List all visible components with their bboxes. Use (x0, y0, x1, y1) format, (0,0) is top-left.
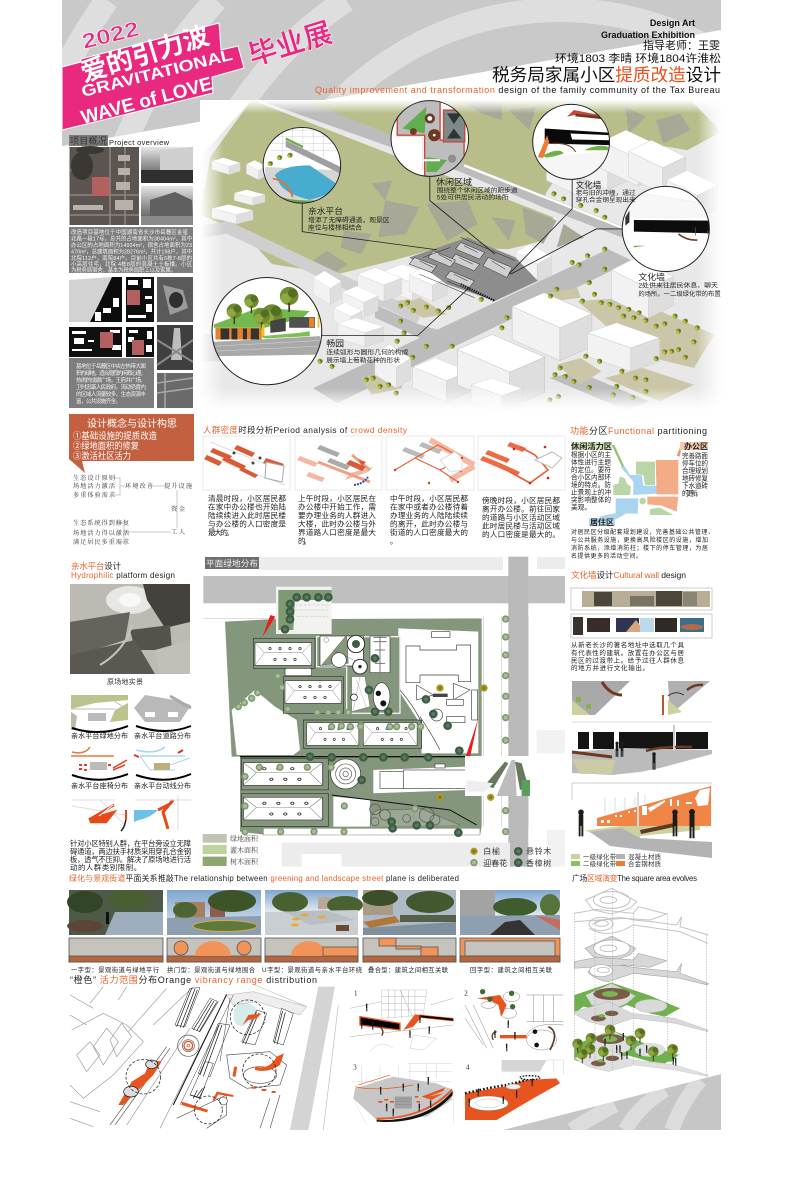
caption row 1 (71, 731, 191, 740)
heading: graduation show: 毕业展 (244, 16, 336, 73)
diagram: concept flow: 场地活力得以激活 (73, 529, 129, 537)
layer: paving (574, 936, 708, 985)
header text block (315, 18, 721, 95)
text: hydrophilic platform: 板，透气不压抑。解决了原场地进行活 (70, 855, 191, 864)
text: leisure zone: 体性进行主题 (571, 458, 611, 466)
text block: location analysis: 基地位于岳麓区中央左热带大面 (76, 362, 146, 370)
panel: design concept callout: ①基础设施的提质改造 (73, 430, 157, 441)
slab buildings (175, 988, 293, 1098)
text: morning: 在家中办公楼也开始陆 (208, 502, 286, 512)
panel: cultural wall elevation strips (571, 588, 712, 638)
orange ribbons (118, 1013, 284, 1112)
text: morning: 陆续续进入此时居民楼 (208, 510, 286, 520)
text: forenoon: 上午时段，小区居民在 (298, 493, 376, 503)
text: forenoon (298, 493, 376, 546)
roads (203, 557, 565, 867)
vignette 4: 4 (466, 1063, 470, 1071)
text block: location analysis: 积的绿地，适合度假的闲暇心理。 (76, 369, 146, 377)
lawn strips (361, 288, 714, 402)
text: leisure zone: 止景观上的冲 (571, 488, 611, 496)
street section captions: 回字型：建筑之间相互关联 (470, 965, 553, 974)
buildings (212, 130, 718, 412)
label: culture wall 1: 老与旧的冲撞，通过 (576, 189, 636, 197)
text: office zone (682, 451, 708, 498)
insets (262, 587, 530, 796)
panel: design concept callout: 设计概念与设计构思 (87, 417, 177, 430)
cultural wall perspective: dark wall (572, 722, 712, 775)
photo 4 (362, 890, 456, 935)
text: residential zone (571, 528, 714, 560)
header text block: 环境1803 李晴 环境1804许淮松 (555, 51, 721, 65)
text: office zone: 地砖修复 (682, 474, 708, 482)
label: culture wall 1 (576, 180, 636, 204)
caption row 2 (71, 781, 191, 790)
text: office zone: 停车位的 (682, 458, 708, 468)
panel: functional zoning (570, 425, 714, 560)
text block: project overview: 办公区的占地面积为14934m²，宿舍占地面积为23 (71, 241, 192, 249)
site model (409, 237, 538, 301)
central park (320, 635, 390, 712)
legend: cultural wall materials: 二级绿化带 (583, 859, 617, 868)
text: morning: 与办公楼的人口密度是 (208, 518, 286, 528)
label: garden (326, 339, 409, 364)
diagram: concept flow: 多重体验需求 (73, 491, 115, 499)
heading: hydrophilic platform (71, 561, 175, 580)
south office and ring plaza (331, 759, 477, 827)
header text block: Quality improvement and transformation design of the family community of the Tax Bureau (315, 85, 720, 95)
text: evening: 的道路与小区活动区域 (482, 512, 560, 522)
text: cultural wall: 有代表性的建筑。放置在办公区与居 (571, 648, 684, 657)
vignette 1: 1 (354, 990, 358, 998)
caption row 2: 亲水平台座椅分布 (71, 781, 128, 790)
street scene photos (67, 890, 560, 935)
header text block: 税务局家属小区提质改造设计 (492, 65, 721, 85)
header text block: Graduation Exhibition (601, 30, 695, 40)
diagram: concept flow: 生态系统得到修复 (73, 519, 129, 527)
legend: tree species: 悬铃木 (526, 846, 551, 856)
title banner: Gravitational Wave of Love: 2022 (80, 18, 141, 54)
panel: figure-ground maps and aerial photos (69, 277, 193, 408)
small plan: green (71, 695, 128, 732)
label: waterside platform (308, 206, 390, 231)
text block: location analysis: 卫时忠厳人民政府。流动恐度内 (76, 383, 146, 391)
aerial axonometric map (200, 100, 721, 412)
label: culture wall 2: 的场所。一二级绿化带的布置 (638, 290, 721, 298)
vignette 2 (464, 989, 563, 1051)
road above the site (258, 100, 625, 237)
heading: greening and landscape street: 绿化与景观街道平面关系推敲The relationship between greening and landscape street plane is deliberated (69, 873, 459, 883)
text: evening: 的人口密度是最大的。 (482, 529, 560, 539)
section: U type (265, 938, 358, 962)
diagram: concept flow: 场地活力激活 (73, 482, 115, 490)
diagram: concept flow: 满足居民多重需求 (73, 538, 129, 546)
vignette 1 (350, 990, 453, 1052)
header text block: Design Art (650, 18, 695, 28)
layer: planted (572, 1025, 708, 1077)
heading: project overview (69, 135, 170, 147)
park paths (110, 1035, 287, 1128)
callout: culture wall 2 (622, 186, 711, 272)
legend: cultural wall materials (571, 852, 662, 868)
text: forenoon: 大楼，此时办公楼与外 (298, 518, 376, 528)
caption row 1: 亲水平台绿地分布 (71, 731, 128, 740)
cultural wall plan sketches (572, 681, 710, 715)
text: noon: 办理业务的人陆陆续续 (390, 510, 468, 520)
section: line type (69, 938, 163, 962)
panel: design concept callout: ②绿地面积的修复 (73, 440, 139, 451)
plan trees (235, 593, 509, 837)
small plan: roads (134, 695, 191, 731)
small diagrams: ramp detail (72, 795, 191, 831)
legend: green area types: 绿地面积 (230, 834, 259, 843)
vignette 4 (465, 1060, 563, 1120)
heading: hydrophilic platform: 亲水平台设计 (71, 561, 122, 571)
text: hydrophilic platform: 碍通道，两边扶手材质采用穿孔合金钢 (70, 847, 191, 856)
text: forenoon: 的。 (298, 536, 311, 546)
title banner: Gravitational Wave of Love: GRAVITATIONAL (80, 47, 235, 101)
callout: garden (212, 278, 322, 385)
legend: green area types (203, 834, 259, 866)
label: leisure area (436, 177, 518, 201)
caption row 2: 亲水平台动线分布 (134, 781, 191, 790)
vignette 3: 3 (353, 1063, 357, 1071)
text: forenoon: 界道路人口密度是最大 (298, 527, 376, 537)
street section captions: U字型：景观街道与亲水平台环绕 (262, 965, 363, 974)
text: evening: 此时居民楼与活动区域 (482, 520, 560, 530)
label: leisure area: 围绕整个休闲区域的跑步道 (437, 187, 518, 194)
layer: green (574, 983, 708, 1032)
text: forenoon: 办公楼中开始工作，需 (298, 502, 376, 512)
heading: plan greenery distribution (205, 557, 565, 570)
heading: plan greenery distribution: 平面绿地分布 (206, 558, 258, 568)
photo 3 (265, 890, 363, 935)
panel: design concept callout (69, 414, 194, 473)
panel: hydrophilic platform design (70, 561, 191, 872)
plan: orange vibrancy range (70, 985, 338, 1130)
text block: location analysis: 富，公共设施齐全。 (76, 397, 121, 405)
edge fades (200, 100, 721, 410)
text: noon: 中午时段，小区居民都 (390, 493, 468, 503)
legend: green area types: 灌木面积 (230, 845, 259, 854)
label: office zone: 办公区 (684, 441, 708, 451)
street section captions: 一字型：景观街道与绿地平行 (71, 965, 160, 974)
heading: functional partitioning: 功能分区Functional partitioning (570, 425, 707, 436)
shadow patches (303, 100, 690, 274)
street section diagrams (69, 938, 560, 962)
text: leisure zone: 突影响整体的 (571, 495, 611, 504)
heading: crowd density: 人群密度时段分析Period analysis of crowd density (203, 425, 408, 435)
road (290, 987, 335, 1130)
diagram: concept flow: 提升设施 (164, 482, 193, 490)
legend: tree species (470, 846, 551, 868)
layer: outline (574, 888, 708, 943)
title banner: Gravitational Wave of Love: WAVE of LOVE (79, 74, 215, 129)
heading: orange vibrancy range: “橙色” 活力范围分布Orange vibrancy range distribution (70, 974, 317, 985)
callout: leisure area (391, 100, 469, 180)
label: leisure area: 休闲区域 (436, 177, 473, 187)
panel: site photos and satellite map (70, 146, 193, 225)
text block: project overview (69, 227, 193, 274)
text block: location analysis: 热闹的成廊广场，王府井广场、 (76, 376, 146, 384)
photo 2 (167, 890, 261, 935)
section: arch type (167, 938, 261, 962)
ground (200, 100, 721, 410)
site plan (203, 557, 565, 868)
text: residential zone: 与公共服务设施，更换高风险楼区的设施，增加 (571, 536, 708, 544)
diagram: concept flow: 资金 (171, 505, 185, 513)
dashed focus circles (126, 1000, 276, 1124)
label: garden: 展示墙上萄勒花种的形状 (326, 356, 400, 364)
street section captions: 拱门型：景观街道与绿地围合 (167, 965, 256, 974)
legend: green area types: 树木面积 (230, 857, 259, 866)
heading: hydrophilic platform: Hydrophilic platform design (71, 571, 175, 580)
text: noon: 街道的人口密度最大的 (390, 527, 468, 537)
text: hydrophilic platform: 动的人群类别限制。 (70, 863, 141, 872)
office building (400, 632, 478, 750)
text: hydrophilic platform: 针对小区特别人群，在平台旁设立无障 (70, 839, 191, 848)
footer swirl corner (503, 1074, 721, 1130)
lower roads (313, 249, 632, 403)
text: morning: 清晨时段，小区居民都 (208, 493, 286, 503)
panel: crowd density forenoon (295, 436, 382, 490)
callout: waterside platform (263, 127, 341, 204)
caption: site photo: 原场地实景 (107, 677, 143, 686)
label: residential zone: 居住区 (590, 517, 614, 527)
text: office zone: 完善路面 (682, 451, 708, 460)
photo 5 (460, 890, 560, 935)
text: cultural wall: 从新老长沙的著名地址中选取几个具 (571, 640, 684, 649)
neighbouring block outlines (70, 987, 227, 1128)
title banner: Gravitational Wave of Love (62, 18, 244, 130)
text: evening (482, 495, 560, 539)
legend: cultural wall materials: 混凝土材质 (628, 852, 662, 861)
label: leisure zone: 休闲活力区 (571, 441, 612, 451)
label: culture wall 2: 文化墙 (638, 272, 666, 282)
diagram: concept flow: 生态设计原则 (73, 474, 115, 482)
text: noon (390, 493, 468, 546)
text: noon: 的离开，此时办公楼与 (390, 518, 468, 528)
panel: crowd density morning (203, 436, 290, 490)
legend: tree species: 白榆 (483, 846, 500, 856)
text: residential zone: 消防系统，添增消防柱；楼下的停车管理，为居 (571, 544, 708, 552)
legend: tree species: 迎春花 (483, 858, 507, 868)
text: cultural wall: 民区的过渡带上。给予过往人群休息 (571, 656, 684, 664)
text: noon: 。 (390, 536, 398, 546)
text: leisure zone: 根据小区的主 (571, 450, 611, 459)
label: culture wall 2 (638, 272, 721, 298)
exploded axonometric (572, 888, 708, 1077)
label: culture wall 1: 穿孔合金钢呈现出来 (576, 196, 636, 204)
text: office zone: 合理规划 (682, 466, 708, 475)
header swirl background (62, 0, 721, 150)
water (233, 1003, 257, 1027)
section: overlap type (363, 938, 456, 962)
label: garden: 畅园 (326, 339, 344, 349)
residential blocks (243, 643, 417, 820)
text: forenoon: 要办理业务的人群进入 (298, 510, 376, 520)
text block: project overview: 改造项目基地位于中国湖南省长沙市岳麓区金星 (71, 228, 189, 236)
diagram: concept flow (73, 474, 193, 546)
text: residential zone: 名提供更多的活动空间。 (571, 552, 642, 560)
photo 1 (67, 890, 163, 935)
text: cultural wall: 的地方并进行文化输出。 (571, 663, 649, 672)
text block: location analysis (69, 358, 154, 408)
text block: project overview: 北路一段17号。总共的占地面积为38404m²，其中 (71, 234, 192, 242)
text: office zone: 的更新。 (682, 488, 702, 498)
text: leisure zone: 美观。 (571, 502, 591, 512)
heading: cultural wall design: 文化墙设计Cultural wall design (571, 569, 686, 580)
text: morning: 最大的。 (208, 527, 234, 537)
text: hydrophilic platform (70, 839, 191, 872)
green base (225, 618, 482, 835)
street section captions: 叠合型：建筑之间相互关联 (368, 965, 449, 974)
vignette 3 (352, 1063, 453, 1125)
title banner: Gravitational Wave of Love: 爱的引力波 (77, 20, 213, 88)
header text block: 指导老师：王雯 (643, 38, 720, 52)
label: culture wall 2: 2处供来往居民休息、聊天 (638, 282, 718, 290)
leader lines (302, 175, 624, 336)
small plan: seats (71, 747, 128, 780)
small plan: circulation (134, 747, 191, 780)
cultural wall perspective: orange wall (572, 783, 712, 858)
heading: project overview: Project overview (109, 138, 170, 147)
site photo (70, 584, 190, 674)
legend: cultural wall materials: 一级绿化带 (583, 852, 617, 861)
text: evening: 傍晚时段，小区居民都 (482, 495, 560, 505)
upper green lawn (303, 100, 721, 200)
text block: project overview: 为税务局宿舍，基本为税务局职工以及家属。 (71, 266, 176, 274)
text: evening: 离开办公楼。前往回家 (482, 504, 560, 514)
label: leisure area: 5处可供居民活动的场所 (437, 194, 509, 201)
label: waterside platform: 增添了无障碍通道，观景区 (308, 215, 390, 224)
vignette 2: 2 (464, 990, 468, 998)
trees (317, 191, 700, 402)
heading: square area evolves: 广场区域演变The square area evolves (572, 873, 697, 883)
vertical guide lines (574, 888, 707, 1075)
text block: location analysis: 的区域人流量较多，生态资源丰 (76, 390, 146, 398)
legend: tree species: 香樟树 (526, 858, 551, 868)
text block: project overview: 470m²，总建筑面积为28276m²，共计198户，其中 (71, 248, 192, 256)
text: leisure zone: 合小区内部环 (571, 472, 611, 482)
text block: project overview: 小高层住宅，北院 4栋8层的混凝土土板楼。小区 (71, 260, 193, 268)
text: office zone: 下水道砖 (682, 481, 708, 490)
text: morning (208, 493, 286, 537)
panel: crowd density evening (478, 436, 565, 490)
text: residential zone: 对居民区分级配套规划建设，完善基础公共管理、 (571, 528, 714, 536)
text: leisure zone: 的定位。要符 (571, 465, 611, 474)
lower green lawn (200, 100, 553, 274)
text: leisure zone (571, 450, 611, 512)
label: waterside platform: 亲水平台 (308, 206, 343, 216)
text: leisure zone: 境的特点。防 (571, 480, 611, 489)
text block: project overview: 北院112户，南院84户。目前小区共有6栋7-8层的 (71, 254, 192, 262)
section: ring type (460, 938, 560, 962)
panel: design concept callout: ③激活社区活力 (73, 450, 131, 461)
diagram: concept flow: 环境改善 (125, 482, 153, 490)
diagram: concept flow: 工人 (171, 528, 185, 536)
street section captions (71, 965, 553, 974)
legend: cultural wall materials: 合金钢材质 (628, 859, 662, 868)
text: cultural wall (571, 640, 684, 672)
label: garden: 连续弧形与圆形几何的构成 (326, 349, 409, 357)
label: waterside platform: 座位与楼梯相结合 (308, 222, 362, 231)
label: culture wall 1: 文化墙 (576, 180, 602, 190)
text: noon: 在家中或者办公楼待着 (390, 502, 468, 512)
caption row 1: 亲水平台道路分布 (134, 731, 191, 740)
heading: project overview: 项目概况 (70, 135, 107, 146)
panel: crowd density noon (386, 436, 474, 490)
callout: culture wall 1 (533, 104, 612, 180)
zoning map (598, 443, 682, 522)
